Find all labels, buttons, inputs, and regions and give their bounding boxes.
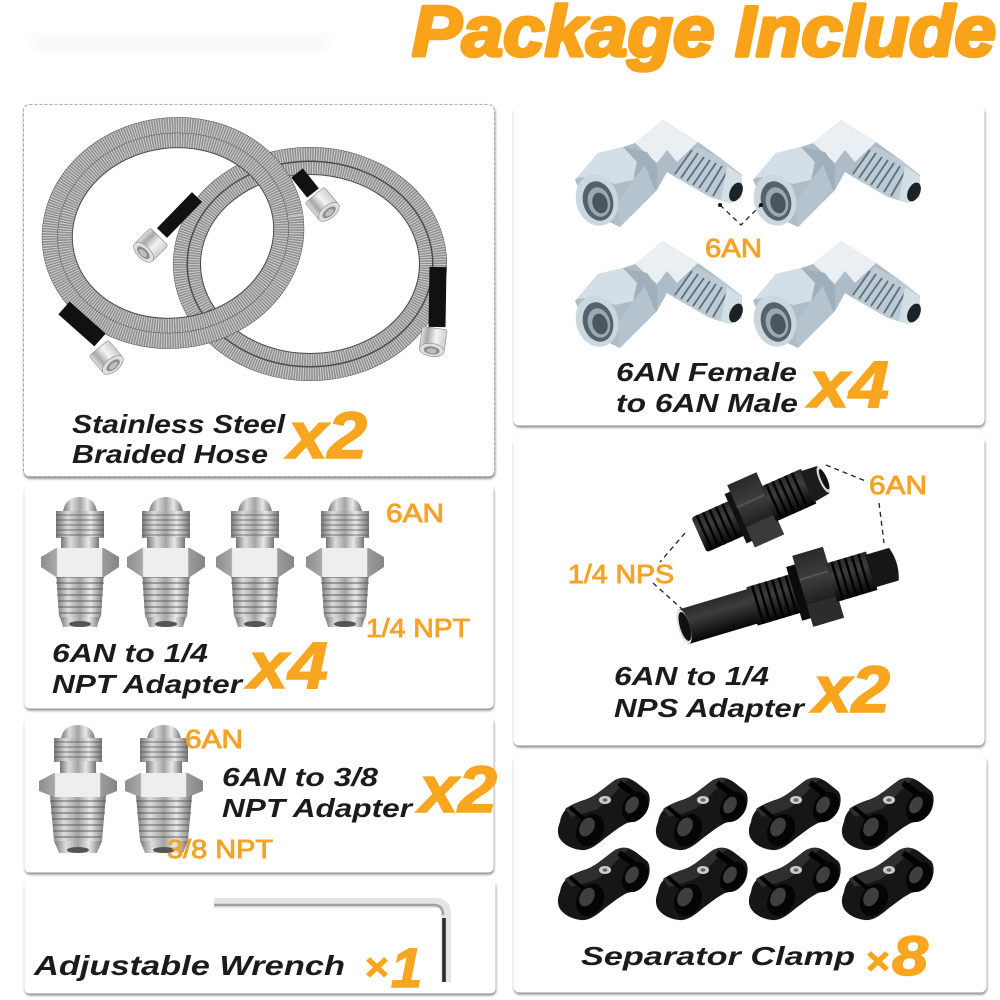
quantity x2: x2	[810, 652, 890, 726]
image: four elbow fittings	[570, 120, 924, 352]
panel: stainless steel braided hose	[24, 104, 494, 476]
label: stainless steel braided hose	[72, 409, 286, 469]
image: two 3/8 NPT fittings	[39, 725, 203, 853]
panel: 6AN to 1/4 NPT adapter	[24, 486, 494, 708]
label: 6AN female to 6AN male	[616, 357, 798, 418]
quantity x8: ×	[866, 941, 890, 983]
label: adjustable wrench: Adjustable Wrench	[33, 950, 345, 981]
panel: separator clamp	[514, 756, 986, 992]
panel: 6AN female to 6AN male	[514, 106, 984, 426]
quantity x1: 1	[391, 936, 422, 999]
card: NPS adapter	[514, 436, 984, 746]
label: 6AN female to 6AN male: 6AN Female	[616, 357, 797, 387]
quantity x1: ×	[365, 947, 389, 989]
panel: 6AN to 1/4 NPS adapter	[514, 436, 984, 746]
label: 6AN to 3/8 NPT adapter: 6AN to 3/8	[222, 762, 379, 792]
label: separator clamp: Separator Clamp	[581, 941, 855, 971]
size label 6AN: 6AN	[705, 233, 762, 263]
image: braided hose coils	[36, 109, 447, 378]
image: upper black fitting	[685, 447, 841, 566]
quantity x2: x2	[416, 752, 497, 826]
size label 6AN: 6AN	[185, 724, 243, 754]
card: hose	[24, 104, 494, 476]
quantity x1	[365, 936, 422, 999]
size label 6AN: 6AN	[386, 498, 444, 528]
size label 3/8 NPT: 3/8 NPT	[167, 834, 273, 864]
image: eight separator clamps	[558, 778, 937, 921]
quantity x4: x4	[806, 347, 889, 421]
size label 1/4 NPT: 1/4 NPT	[366, 613, 470, 643]
faint background smudge	[32, 34, 328, 52]
label: 6AN to 1/4 NPS adapter: NPS Adapter	[614, 693, 806, 723]
card: elbows	[514, 106, 984, 426]
quantity x8: 8	[892, 924, 929, 987]
size label 6AN: 6AN	[869, 470, 927, 500]
label: 6AN to 1/4 NPT adapter	[52, 638, 244, 699]
label: stainless steel braided hose: Braided Hose	[72, 439, 268, 469]
callout lines	[653, 465, 884, 609]
quantity x2: x2	[285, 398, 367, 472]
size label 1/4 NPS: 1/4 NPS	[568, 559, 674, 589]
label: 6AN to 1/4 NPS adapter	[614, 661, 806, 723]
image: hex wrench	[214, 903, 446, 982]
label: 6AN to 1/4 NPT adapter: 6AN to 1/4	[52, 638, 209, 668]
label: 6AN to 1/4 NPS adapter: 6AN to 1/4	[614, 661, 770, 691]
label: stainless steel braided hose: Stainless Steel	[72, 409, 286, 439]
image: four 1/4 NPT fittings	[41, 497, 384, 627]
label: 6AN female to 6AN male: to 6AN Male	[616, 388, 798, 418]
label: 6AN to 3/8 NPT adapter: NPT Adapter	[222, 793, 414, 823]
panel: adjustable wrench	[24, 880, 496, 999]
panel: 6AN to 3/8 NPT adapter	[24, 718, 497, 872]
quantity x4: x4	[245, 628, 328, 702]
card: NPT adapter	[24, 486, 494, 708]
card: clamp	[514, 756, 986, 992]
card: wrench	[24, 880, 496, 994]
label: 6AN to 1/4 NPT adapter: NPT Adapter	[52, 669, 244, 699]
quantity x8	[866, 924, 929, 987]
label: 6AN to 3/8 NPT adapter	[222, 762, 414, 823]
callout line to 6AN	[718, 203, 763, 225]
card: 3/8 adapter	[24, 718, 494, 872]
image: lower black fitting	[668, 528, 907, 664]
